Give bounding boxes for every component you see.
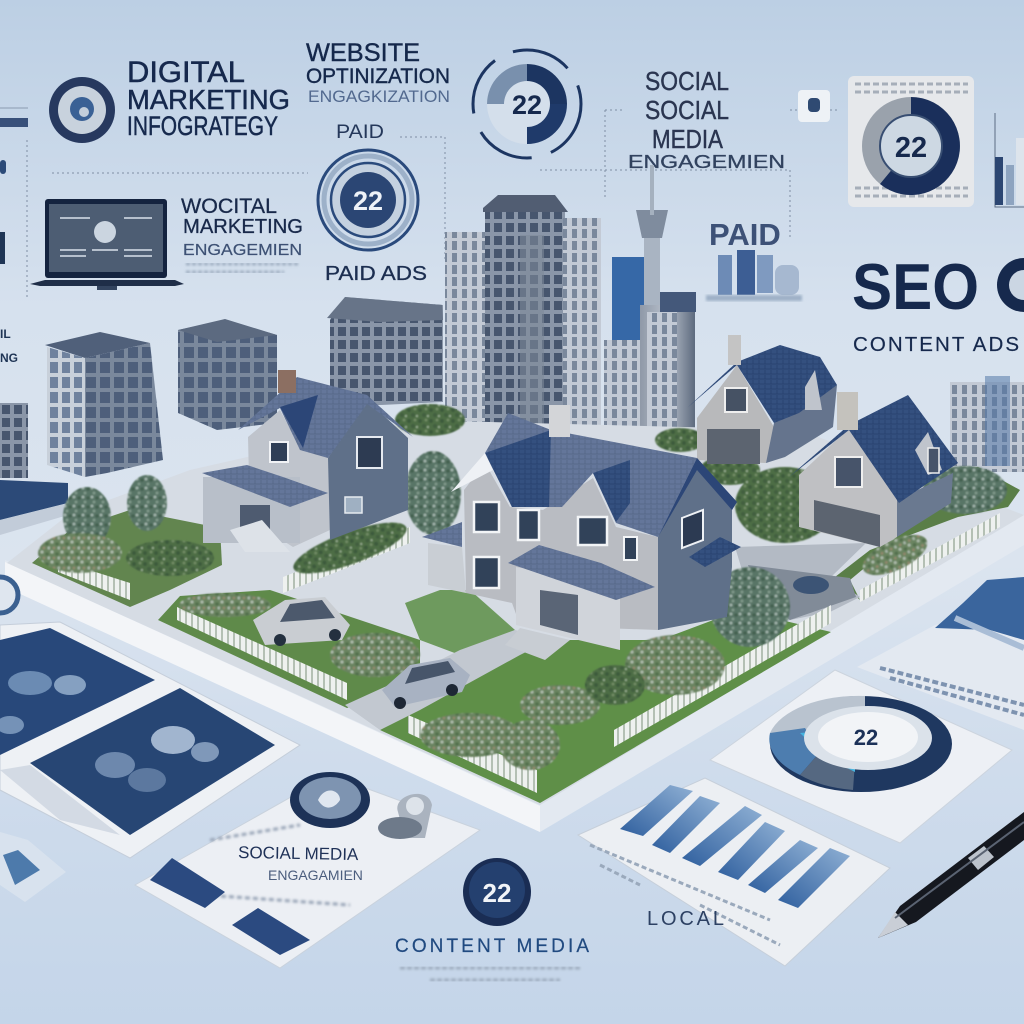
label: content media xyxy=(395,936,589,980)
chart: ring gauge xyxy=(769,696,952,792)
road: dark xyxy=(748,565,856,620)
heading: SOCIAL MEDIA xyxy=(238,843,359,864)
panel: paid graphic: PAID xyxy=(709,217,781,252)
fence: right xyxy=(614,605,831,747)
heading: WEBSITE xyxy=(306,39,420,67)
far left building xyxy=(0,403,28,478)
roof: main xyxy=(485,413,697,537)
house: left xyxy=(202,370,413,552)
small porch xyxy=(428,543,466,593)
panel: social media paper xyxy=(135,772,480,968)
house: right back xyxy=(687,335,837,464)
heading xyxy=(306,39,450,88)
icon: car dark xyxy=(793,576,829,594)
fence: far right xyxy=(860,513,1000,602)
panel: bar chart paper xyxy=(578,778,890,966)
panel: score card: 22 xyxy=(895,132,927,164)
roof: dark gable xyxy=(485,430,551,507)
title: DIGITAL xyxy=(127,56,245,89)
panel: social media paper: ENGAGAMIEN xyxy=(268,867,363,883)
panel: tablet left xyxy=(0,622,300,858)
right buildings xyxy=(950,382,1024,472)
panel: social marketing text: WOCITAL xyxy=(181,195,277,218)
path: walkway xyxy=(345,630,550,730)
chart: donut 22 top xyxy=(473,50,581,158)
fence: yard xyxy=(177,607,347,700)
main porch xyxy=(516,567,620,650)
left edge fragments: NG xyxy=(0,351,18,365)
lawn: left xyxy=(32,510,222,607)
label: content media: CONTENT MEDIA xyxy=(395,936,589,957)
panel: social media heading: SOCIAL xyxy=(645,95,729,125)
fence: back xyxy=(283,527,410,593)
title: INFOGRATEGY xyxy=(127,111,278,141)
label: PAID xyxy=(336,122,384,143)
heading: OPTINIZATION xyxy=(306,65,450,88)
label: PAID ADS xyxy=(325,263,427,285)
panel: SEO heading: SEO xyxy=(852,250,979,323)
blue towers xyxy=(612,257,644,352)
title xyxy=(127,56,290,141)
title: MARKETING xyxy=(127,84,290,115)
icon: pin xyxy=(378,794,432,839)
panel: paid graphic xyxy=(706,217,802,301)
label: CONTENT ADS xyxy=(853,333,1019,356)
label: LOCAL xyxy=(647,908,724,930)
house: main centre xyxy=(422,405,741,660)
needle tower xyxy=(636,165,668,340)
icon: car silver xyxy=(253,597,350,646)
icon: pen xyxy=(878,812,1024,938)
lawn: front of house xyxy=(405,590,515,655)
panel: city skyline xyxy=(0,165,1024,535)
icon: SEO badge xyxy=(997,258,1024,312)
central tower xyxy=(445,232,490,432)
icon: location pin card xyxy=(798,90,830,122)
panel: social media heading: SOCIAL xyxy=(645,66,729,96)
chart: circle 22 lower xyxy=(463,858,531,926)
dashed connector lines xyxy=(27,110,840,300)
chart: circle 22 lower: 22 xyxy=(483,878,511,908)
panel: website optimization xyxy=(306,39,450,143)
subheading: ENGAGEMIEN xyxy=(628,152,785,172)
lawn: main front xyxy=(380,610,831,803)
chart: ring gauge: 22 xyxy=(854,725,878,750)
left edge fragments: IL xyxy=(0,327,11,341)
text placeholder lines xyxy=(130,144,270,146)
lawn: right xyxy=(835,467,1020,600)
mid left buildings xyxy=(330,297,443,405)
wall: right side xyxy=(658,458,732,630)
panel: score card xyxy=(848,76,974,207)
icon: social badge xyxy=(290,772,370,828)
panel: laptop xyxy=(30,199,184,290)
panel: ground platform xyxy=(5,420,1024,832)
left edge fragments xyxy=(0,108,28,365)
panel: social media heading xyxy=(628,66,785,172)
icon: target badge xyxy=(49,77,115,143)
lawn: car yard xyxy=(158,590,420,708)
panel: social marketing text xyxy=(181,195,303,272)
dark labels xyxy=(150,858,225,908)
trees and bushes xyxy=(38,404,1007,770)
chart: donut 22 top: 22 xyxy=(512,90,542,120)
panel: social marketing text: ENGAGEMIEN xyxy=(183,242,302,259)
fence: bottom xyxy=(408,715,537,793)
subheading: ENGAGKIZATION xyxy=(308,87,450,106)
chart: paid badge 22: 22 xyxy=(353,186,383,216)
icon: small card lower left xyxy=(0,832,66,902)
wall: front xyxy=(464,463,658,630)
panel: SEO heading xyxy=(852,250,1024,368)
icon: ring left edge xyxy=(0,577,18,613)
panel: social media heading: MEDIA xyxy=(652,124,724,154)
fence: left xyxy=(58,560,130,600)
icon: car blue-grey xyxy=(382,658,470,709)
panel: title block xyxy=(49,56,290,145)
bar chart: top right xyxy=(995,113,1024,207)
panel: gauge card xyxy=(710,670,1012,843)
panel: social marketing text: MARKETING xyxy=(183,215,303,238)
roof: dormer xyxy=(593,460,630,522)
house: right front xyxy=(789,392,958,547)
driveway: right xyxy=(735,543,866,622)
panel: top right paper xyxy=(857,577,1024,730)
chart: paid badge 22 xyxy=(318,150,427,285)
